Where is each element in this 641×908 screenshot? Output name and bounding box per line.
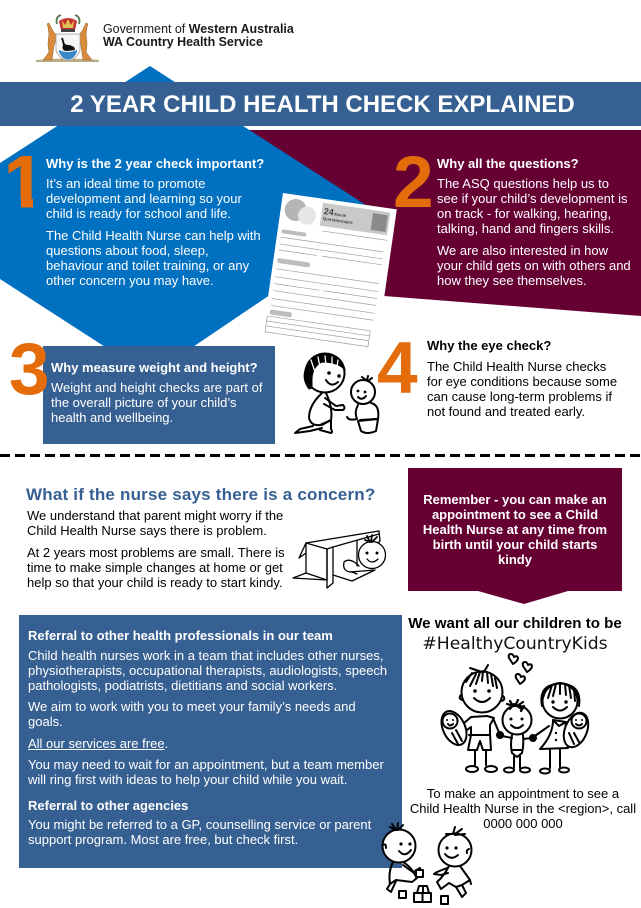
panel text: why measure weight and height: Weight and height checks are part of (51, 380, 262, 395)
panel text: why all the questions (437, 156, 631, 288)
heading: what if the nurse says there is a concern: What if the nurse says there is a concern? (26, 485, 375, 504)
panel text: why all the questions: Why all the questions? (437, 156, 579, 171)
number 1: 1 (4, 142, 45, 223)
illustration: child with nurse and bucket (295, 354, 378, 433)
panel text: why is the 2 year check important: child is ready for school and life. (46, 206, 231, 221)
text block: concern explanation: time to make simple changes at home or get (27, 560, 283, 575)
panel text: why the eye check (427, 338, 617, 419)
hashtag: #HealthyCountryKids (422, 634, 608, 654)
text block: concern explanation: Child Health Nurse says there is problem. (27, 523, 267, 538)
panel: referral box (19, 615, 402, 868)
panel text: why is the 2 year check important: behaviour and toilet training, or any (46, 258, 249, 273)
panel text: referral information: physiotherapists, occupational therapists, audiologists, speech (28, 663, 387, 678)
callout text: remember: birth until your child starts (433, 537, 597, 552)
callout text: remember: kindy (498, 552, 532, 567)
panel text: why is the 2 year check important: other concern you may have. (46, 273, 214, 288)
panel text: referral information (28, 628, 387, 847)
callout text: remember (423, 492, 607, 567)
title: 2 YEAR CHILD HEALTH CHECK EXPLAINED (70, 91, 575, 118)
heading: we want all our children to be: We want all our children to be (408, 615, 622, 632)
panel text: referral information: Child health nurses work in a team that includes other nurses, (28, 648, 384, 663)
panel text: referral information: Referral to other health professionals in our team (28, 628, 333, 643)
panel text: why is the 2 year check important: development and learning so your (46, 191, 242, 206)
panel: maroon background for question 2 (248, 130, 641, 316)
text block: appointment contact: 0000 000 000 (483, 816, 563, 831)
panel text: referral information: You might be referred to a GP, counselling service or parent (28, 817, 371, 832)
text block: appointment contact: Child Health Nurse in the <region>, call (410, 801, 636, 816)
panel text: referral information: All our services are free. (28, 736, 168, 751)
text block: concern explanation: At 2 years most problems are small. There is (27, 545, 285, 560)
panel text: why all the questions: The ASQ questions help us to (437, 176, 609, 191)
number 4: 4 (377, 328, 418, 409)
panel text: why all the questions: on track - for walking, hearing, (437, 206, 611, 221)
panel text: referral information: pathologists, podiatrists, dietitians and social workers. (28, 678, 337, 693)
text block: appointment contact: To make an appointment to see a (427, 786, 619, 801)
panel text: why the eye check: not found and treated early. (427, 404, 585, 419)
panel text: why the eye check: can cause long-term problems if (427, 389, 612, 404)
illustration: two children with blocks (382, 823, 472, 904)
icon: WA coat of arms (36, 15, 99, 62)
text block: concern explanation (27, 508, 285, 590)
panel text: why the eye check: Why the eye check? (427, 338, 551, 353)
panel text: why the eye check: for eye conditions because some (427, 374, 617, 389)
logo text: government name: Government of Western Australia (103, 22, 294, 36)
panel text: why measure weight and height: health and wellbeing. (51, 410, 173, 425)
dashed divider (0, 454, 641, 457)
image: tilted questionnaire form: 24 (323, 206, 334, 217)
panel text: why all the questions: see if your child’s development is (437, 191, 628, 206)
title banner (0, 82, 641, 126)
panel text: why all the questions: how they see themselves. (437, 273, 587, 288)
panel text: why is the 2 year check important: It’s an ideal time to promote (46, 176, 205, 191)
panel text: why measure weight and height: the overall picture of your child’s (51, 395, 236, 410)
image: tilted questionnaire form (262, 193, 397, 354)
panel text: referral information: support program. Most are free, but check first. (28, 832, 298, 847)
panel text: why all the questions: We are also interested in how (437, 243, 608, 258)
panel text: why measure weight and height (51, 360, 262, 425)
illustration: child crawling through a box (293, 531, 386, 588)
callout text: remember: appointment to see a Child (432, 507, 598, 522)
number 3: 3 (9, 329, 50, 410)
number 2: 2 (393, 142, 434, 223)
panel text: referral information: goals. (28, 714, 63, 729)
panel text: why is the 2 year check important: Why is the 2 year check important? (46, 156, 264, 171)
panel text: referral information: We aim to work with you to meet your family’s needs and (28, 699, 356, 714)
panel text: why is the 2 year check important: The Child Health Nurse can help with (46, 228, 261, 243)
panel text: referral information: You may need to wait for an appointment, but a team member (28, 757, 384, 772)
panel: blue hexagon for question 1 (0, 66, 372, 376)
text block: appointment contact (410, 786, 636, 831)
panel text: why all the questions: talking, hand and fingers skills. (437, 221, 614, 236)
panel text: referral information: will ring first with ideas to help your child while you wait. (28, 772, 347, 787)
text block: concern explanation: help so that your child is ready to start kindy. (27, 575, 283, 590)
logo text: government name (103, 22, 294, 49)
panel text: why all the questions: your child gets on with others and (437, 258, 631, 273)
panel text: why measure weight and height: Why measure weight and height? (51, 360, 258, 375)
panel text: referral information: Referral to other agencies (28, 798, 188, 813)
panel text: why is the 2 year check important: questions about food, sleep, (46, 243, 209, 258)
logo text: government name: WA Country Health Service (103, 35, 263, 49)
panel text: why the eye check: The Child Health Nurse checks (427, 359, 606, 374)
text block: concern explanation: We understand that parent might worry if the (27, 508, 283, 523)
panel text: why is the 2 year check important (46, 156, 264, 288)
image: tilted questionnaire form: Month (334, 212, 347, 218)
panel: question 3 box (43, 346, 275, 444)
callout text: remember: Health Nurse at any time from (423, 522, 607, 537)
illustration: family with babies (436, 654, 593, 774)
callout: remember arrow box (408, 468, 622, 604)
callout text: remember: Remember - you can make an (423, 492, 607, 507)
image: tilted questionnaire form: Questionnaire (322, 216, 354, 225)
